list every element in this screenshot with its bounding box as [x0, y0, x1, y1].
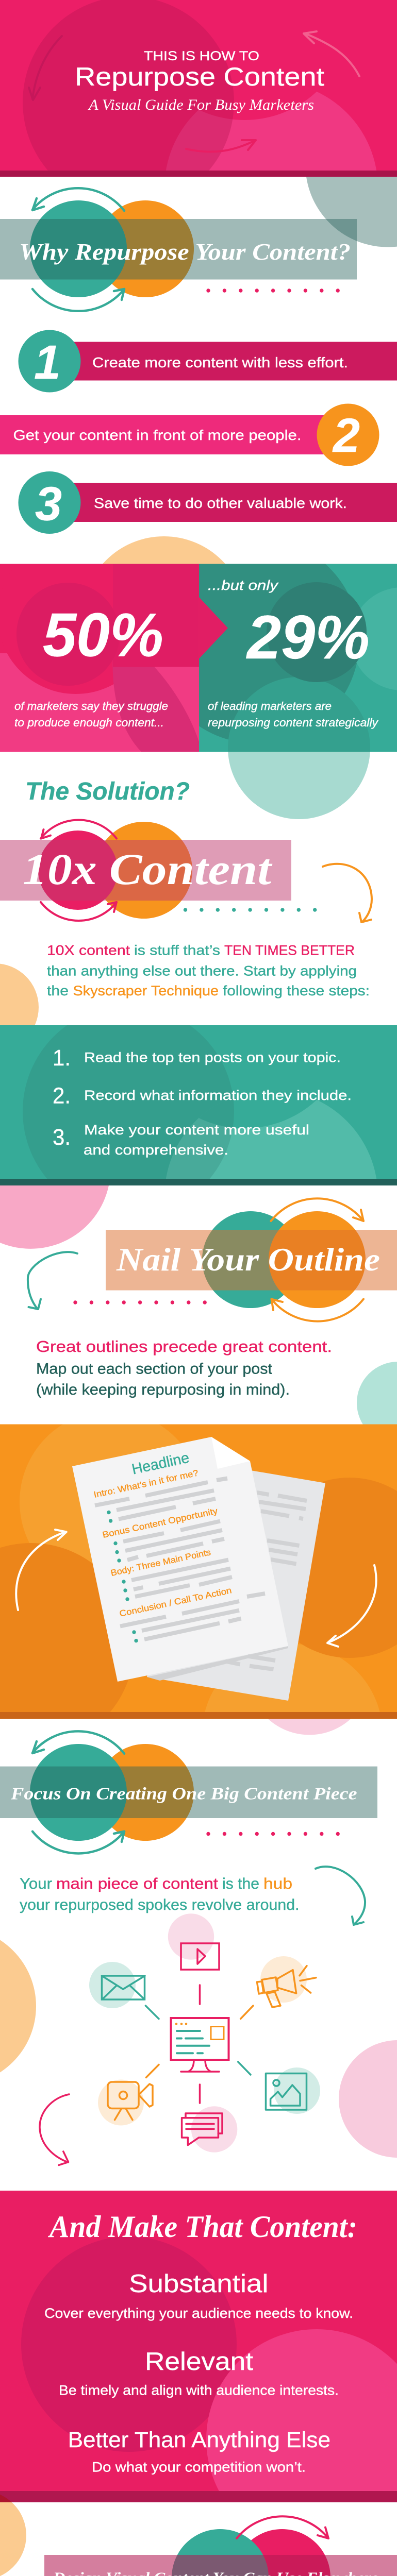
- item: relevant: Be timely and align with audience interests.: [59, 2382, 339, 2398]
- icon: front page outline: Headline: [130, 1450, 191, 1478]
- decoration: circles behind stats: [82, 536, 370, 819]
- text: 10x description: [47, 943, 370, 998]
- stat: 29 percent: 29%: [246, 603, 370, 672]
- arrow: hero left: [29, 36, 62, 100]
- item: substantial: [44, 2270, 353, 2321]
- panel: focus heading: [0, 1731, 377, 1853]
- panel: stats: [0, 564, 397, 752]
- heading: focus: Focus On Creating One Big Content Piece: [10, 1785, 357, 1804]
- panel: nail your outline heading: [0, 1185, 397, 1321]
- heading: the solution: The Solution?: [25, 778, 190, 805]
- decoration: side circles: [0, 1927, 397, 2158]
- decoration: orange circle: [0, 2490, 26, 2576]
- dotted line: [208, 289, 338, 293]
- text: outline description: Map out each section of your post: [36, 1361, 273, 1378]
- panel: reason 3: 3: [35, 477, 62, 531]
- decoration: pink circle: [268, 1719, 351, 1735]
- text: hub description: Your: [20, 1875, 52, 1892]
- arrow: hero bottom: [186, 140, 256, 152]
- text: outline description: (while keeping repurposing in mind).: [36, 1381, 290, 1398]
- item: better than anything else: Better Than Anything Else: [68, 2428, 330, 2452]
- panel: reason 1: 1: [34, 335, 61, 389]
- heading: nail your outline: Nail Your Outline: [116, 1241, 380, 1278]
- arrow: white left: [16, 1530, 67, 1610]
- text: 10x description: TEN TIMES BETTER: [224, 943, 355, 958]
- title: Repurpose Content: [75, 62, 324, 91]
- step 2: Record what information they include.: [84, 1088, 352, 1103]
- item: better than anything else: Do what your competition won’t.: [92, 2460, 306, 2475]
- item: relevant: Relevant: [145, 2348, 253, 2376]
- arrow: white right: [327, 1565, 376, 1647]
- chevron: [198, 597, 228, 659]
- panel: reason 3: Save time to do other valuable work.: [94, 495, 347, 511]
- panel: reason 2: 2: [332, 409, 360, 462]
- text: 10x description: the: [47, 983, 69, 998]
- text: hub description: [20, 1875, 299, 1913]
- item: relevant: [59, 2348, 339, 2398]
- arrows: loop: [271, 1198, 363, 1321]
- step 2: [53, 1083, 352, 1109]
- title: A Visual Guide For Busy Marketers: [88, 96, 314, 113]
- heading: and make that content: And Make That Content:: [47, 2210, 357, 2244]
- panel: reason 3: [19, 471, 397, 534]
- stat: 29 percent: ...but only: [208, 578, 279, 593]
- dotted line: [186, 908, 315, 912]
- icon: front page outline: [72, 1437, 288, 1682]
- step 2: 2.: [53, 1083, 71, 1109]
- arrow: hero right: [304, 31, 359, 76]
- panel: 50 percent: [0, 564, 199, 752]
- arrows: loop: [41, 820, 117, 921]
- text: 10x description: following these steps:: [223, 983, 370, 998]
- arrows: loop: [32, 188, 124, 311]
- heading: why repurpose: Why Repurpose Your Content?: [19, 239, 351, 265]
- icon: back page: [147, 1459, 325, 1701]
- arrows: loop: [237, 2516, 328, 2576]
- step 1: 1.: [53, 1045, 71, 1071]
- icon: front page outline: Body: Three Main Points: [110, 1547, 212, 1578]
- dotted line: [75, 1300, 205, 1304]
- panel: reason 2: [0, 404, 379, 466]
- text: 10x description: 10X content: [47, 943, 130, 958]
- step 1: [53, 1045, 341, 1071]
- item: substantial: Cover everything your audience needs to know.: [44, 2306, 353, 2321]
- stat: 29 percent: of leading marketers are: [208, 700, 332, 713]
- stat: 29 percent: repurposing content strategically: [208, 716, 379, 729]
- stat: 50 percent: [14, 601, 168, 729]
- stat: 50 percent: of marketers say they struggle: [14, 700, 168, 713]
- arrow: pink: [40, 2094, 69, 2165]
- icon: monitor hub: [171, 2018, 229, 2072]
- heading: 10x content: 10x Content: [23, 844, 273, 894]
- decoration: pale teal circle: [357, 1362, 397, 1444]
- title: THIS IS HOW TO: [144, 49, 259, 63]
- step 3: 3.: [53, 1125, 71, 1150]
- arrow: teal: [316, 1867, 365, 1925]
- icon: email: [89, 1962, 145, 2008]
- text: hub description: hub: [263, 1875, 292, 1892]
- stat: 29 percent: [208, 578, 379, 729]
- icon: front page outline: Bonus Content Opportunity: [102, 1506, 219, 1540]
- text: 10x description: Skyscraper Technique: [73, 983, 219, 998]
- item: substantial: Substantial: [129, 2270, 269, 2298]
- step 3: [53, 1122, 309, 1158]
- text: outline description: [36, 1337, 332, 1398]
- arrow: orange: [323, 864, 372, 922]
- panel: and make that content: [0, 2191, 397, 2502]
- text: 10x description: than anything else out there. Start by applying: [47, 963, 357, 979]
- spokes: [145, 1985, 253, 2103]
- icon: megaphone: [257, 1956, 316, 2007]
- panel: outline document: [0, 1424, 397, 1719]
- arrow: teal: [28, 1252, 77, 1309]
- panel: 10x content heading: [0, 820, 372, 922]
- step 3: and comprehensive.: [84, 1142, 228, 1158]
- icon: image: [266, 2067, 320, 2114]
- item: better than anything else: [68, 2428, 330, 2475]
- icon: video camera: [98, 2079, 153, 2126]
- panel: reason 2: Get your content in front of more people.: [13, 427, 301, 443]
- decoration: orange circle left: [0, 963, 39, 1051]
- text: hub description: is the: [222, 1875, 259, 1892]
- panel: reason 1: Create more content with less effort.: [92, 354, 348, 370]
- step 3: Make your content more useful: [84, 1122, 309, 1138]
- icon: front page outline: Intro: What’s in it for me?: [93, 1468, 199, 1500]
- text: hub description: your repurposed spokes revolve around.: [20, 1896, 299, 1913]
- icon: chat: [182, 2106, 237, 2153]
- panel: reason 1: [19, 330, 397, 393]
- chart: hub and spokes: [89, 1913, 320, 2153]
- title: [75, 49, 324, 113]
- icon: slide play: [168, 1913, 219, 1970]
- panel: skyscraper steps: [0, 1025, 397, 1185]
- stat: 50 percent: 50%: [43, 601, 163, 670]
- text: outline description: Great outlines precede great content.: [36, 1337, 332, 1355]
- arrows: loop: [32, 1731, 124, 1853]
- panel: design visual content heading: [44, 2516, 397, 2576]
- panel: 29 percent: [199, 564, 397, 752]
- dotted line: [208, 1832, 338, 1836]
- panel: hero: [0, 0, 397, 177]
- stat: 50 percent: to produce enough content...: [14, 716, 164, 729]
- step 1: Read the top ten posts on your topic.: [84, 1050, 341, 1065]
- decoration: grey teal circle: [306, 177, 397, 247]
- icon: front page outline: Conclusion / Call To Action: [119, 1585, 233, 1619]
- panel: why repurpose heading: [0, 188, 357, 311]
- text: 10x description: is stuff that’s: [134, 943, 220, 958]
- text: hub description: main piece of content: [56, 1875, 219, 1892]
